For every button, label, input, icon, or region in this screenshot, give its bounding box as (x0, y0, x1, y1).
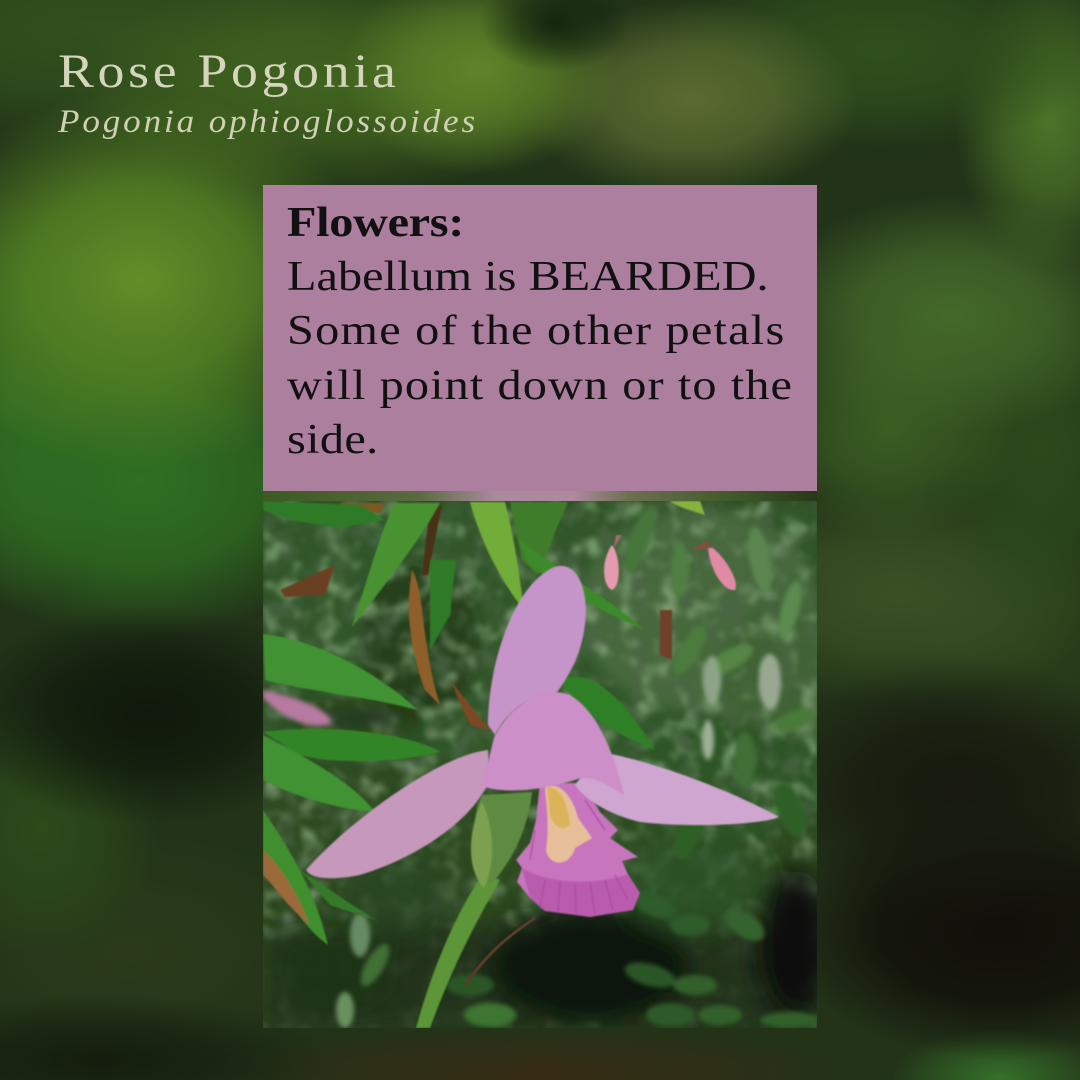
bearded labellum (516, 783, 640, 917)
dorsal sepal (488, 566, 586, 735)
stem (416, 875, 500, 1028)
foliage base (263, 501, 840, 840)
side petal right (575, 752, 779, 825)
brown stems and dead leaves (280, 503, 672, 730)
text block: labellum description: Some of the other petals (287, 308, 785, 354)
title: common name: Rose Pogonia (58, 45, 400, 98)
text block: labellum description: Labellum is BEARDED. (287, 254, 769, 300)
bright green leaves (263, 501, 705, 945)
heading: Flowers: Flowers: (287, 200, 464, 246)
small leaves right (336, 505, 820, 1028)
text block: labellum description: will point down or to the (287, 363, 793, 409)
thin brown twig (465, 918, 535, 985)
pale buds (702, 654, 781, 760)
pink flower buds (604, 535, 736, 590)
text block: labellum description: side. (287, 417, 379, 463)
foliage texture (263, 502, 817, 926)
ovary / green sheath (471, 792, 532, 888)
photo: rose pogonia orchid (263, 501, 817, 1028)
blurred pink flower at left edge (263, 690, 332, 726)
blended strip between panel and photo (263, 491, 817, 501)
central hood petal (480, 692, 624, 795)
dark lower foliage (263, 706, 835, 1035)
subtitle: scientific name: Pogonia ophioglossoides (58, 104, 478, 140)
side petal left (306, 750, 490, 878)
panel: flower description (263, 185, 817, 491)
text block: labellum description (287, 254, 793, 463)
